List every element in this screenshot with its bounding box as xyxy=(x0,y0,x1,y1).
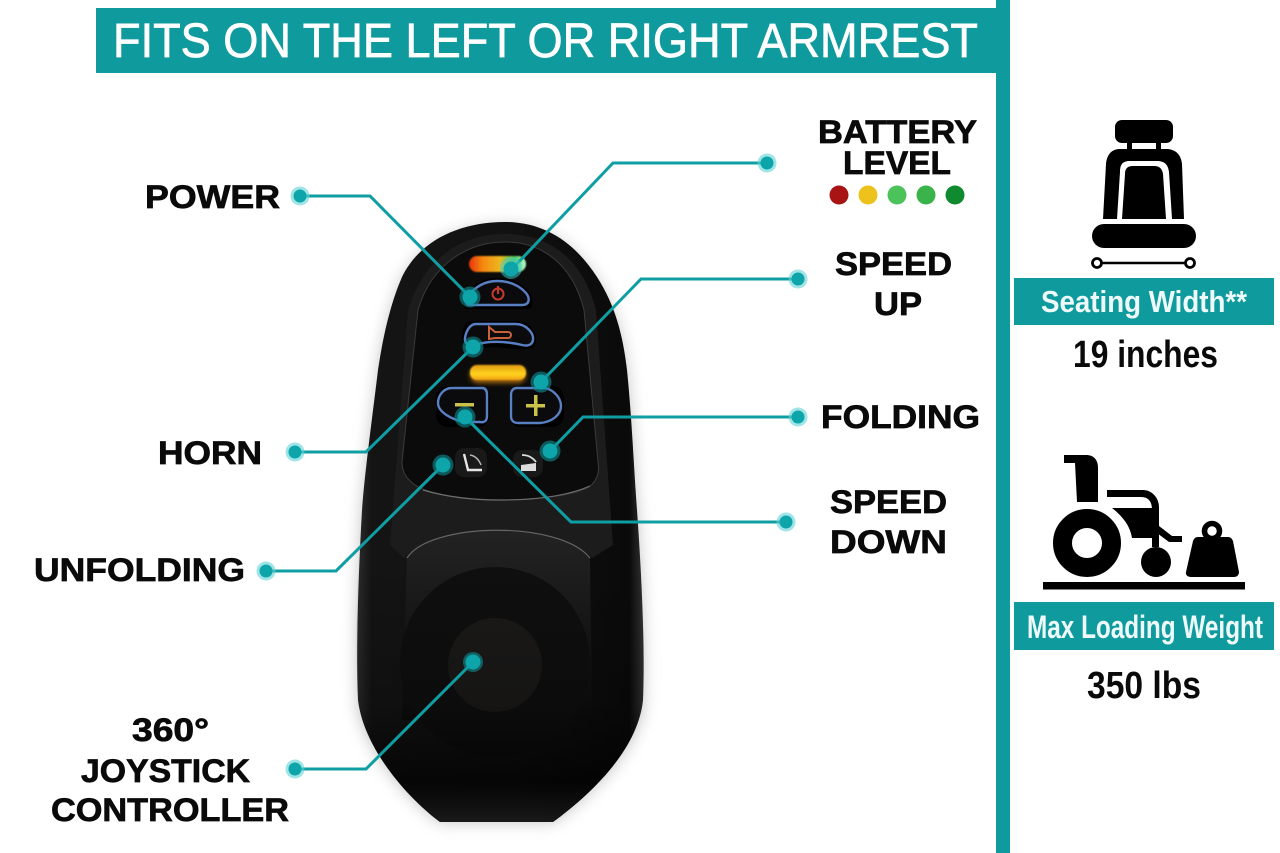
textured faceplate xyxy=(390,234,613,558)
callout: 360 joystick controller xyxy=(51,652,483,828)
callout: power xyxy=(145,179,480,308)
callout: 360 joystick controller: CONTROLLER xyxy=(51,792,289,828)
callout: battery level: BATTERY xyxy=(818,114,977,150)
icon: wheelchair with weight xyxy=(1043,455,1245,590)
callout: horn: HORN xyxy=(158,435,262,471)
power button xyxy=(462,278,532,309)
seating width label xyxy=(1014,278,1274,325)
horn button xyxy=(462,321,536,349)
callout: speed down xyxy=(454,406,947,560)
callout: speed up: SPEED xyxy=(835,246,952,282)
battery level LED xyxy=(469,256,526,272)
callout: battery level: LEVEL xyxy=(843,145,951,181)
callout: speed up xyxy=(530,246,952,392)
vertical divider bar xyxy=(996,0,1010,853)
max loading weight value: 350 lbs xyxy=(1087,665,1201,707)
joystick controller device xyxy=(356,222,644,822)
callout: unfolding xyxy=(34,454,454,588)
callout: folding xyxy=(540,399,980,462)
callout: horn xyxy=(158,336,484,471)
callout: 360 joystick controller: 360° xyxy=(132,712,209,748)
speed down button xyxy=(436,386,490,427)
callout: 360 joystick controller: JOYSTICK xyxy=(81,753,250,789)
callout: speed down: SPEED xyxy=(830,484,947,520)
callout: power: POWER xyxy=(145,179,280,215)
lower shading xyxy=(356,560,644,822)
unfolding button xyxy=(455,448,487,477)
callout: speed up: UP xyxy=(874,286,922,322)
seating width value: 19 inches xyxy=(1073,334,1218,376)
button well xyxy=(402,242,598,500)
seating width label: Seating Width** xyxy=(1041,284,1248,319)
callout: folding: FOLDING xyxy=(821,399,980,435)
joystick housing xyxy=(402,530,592,720)
speed level LED xyxy=(470,367,526,383)
icon: car seat xyxy=(1092,120,1196,268)
battery level colour dots xyxy=(830,186,964,204)
callout: battery level xyxy=(500,114,977,279)
title banner: FITS ON THE LEFT OR RIGHT ARMREST xyxy=(113,15,978,68)
callout: speed down: DOWN xyxy=(830,524,947,560)
callout: unfolding: UNFOLDING xyxy=(34,552,245,588)
folding button xyxy=(513,450,543,477)
speed up button xyxy=(509,386,564,427)
joystick knob xyxy=(448,618,542,712)
